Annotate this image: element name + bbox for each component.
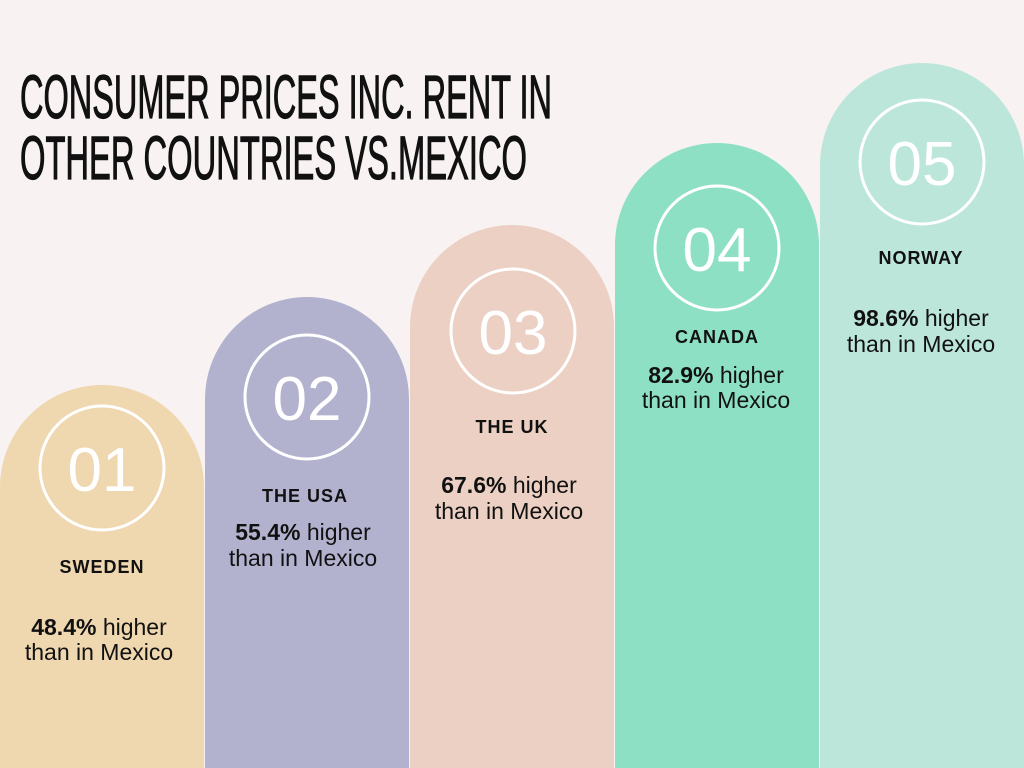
- text: Sweden: than in Mexico: [25, 639, 173, 665]
- icon: number circle 04: 04: [683, 216, 751, 285]
- icon: number circle 05: [860, 100, 984, 224]
- text: Norway: NORWAY: [878, 248, 964, 268]
- title: [20, 63, 552, 192]
- icon: number circle 01: [40, 406, 164, 530]
- icon: number circle 03: 03: [479, 299, 547, 368]
- text: Canada: 82.9% higher: [648, 362, 784, 388]
- panel: Canada: [615, 143, 819, 768]
- text: Canada: [642, 327, 790, 413]
- text: UK: THE UK: [476, 417, 548, 437]
- text: Norway: 98.6% higher: [853, 305, 989, 331]
- text: USA: 55.4% higher: [235, 519, 371, 545]
- text: UK: [435, 417, 583, 524]
- text: UK: than in Mexico: [435, 498, 583, 524]
- icon: number circle 03: [451, 269, 575, 393]
- text: Canada: CANADA: [675, 327, 759, 347]
- text: USA: [229, 486, 377, 571]
- text: USA: THE USA: [262, 486, 348, 506]
- panel: USA: [205, 297, 409, 768]
- icon: number circle 02: [245, 335, 369, 459]
- icon: number circle 05: 05: [888, 130, 956, 199]
- text: USA: than in Mexico: [229, 545, 377, 571]
- text: Sweden: [25, 557, 173, 665]
- panel: Norway: [820, 63, 1024, 768]
- icon: number circle 02: 02: [273, 365, 341, 434]
- panel: UK: [410, 225, 614, 768]
- text: Sweden: 48.4% higher: [31, 614, 167, 640]
- panel: Sweden: [0, 385, 204, 768]
- title: CONSUMER PRICES INC. RENT IN: [20, 63, 552, 131]
- text: Sweden: SWEDEN: [59, 557, 145, 577]
- text: UK: 67.6% higher: [441, 472, 577, 498]
- text: Norway: [847, 248, 995, 357]
- text: Canada: than in Mexico: [642, 387, 790, 413]
- text: Norway: than in Mexico: [847, 331, 995, 357]
- title: OTHER COUNTRIES VS.MEXICO: [20, 124, 527, 192]
- icon: number circle 04: [655, 186, 779, 310]
- icon: number circle 01: 01: [68, 436, 136, 505]
